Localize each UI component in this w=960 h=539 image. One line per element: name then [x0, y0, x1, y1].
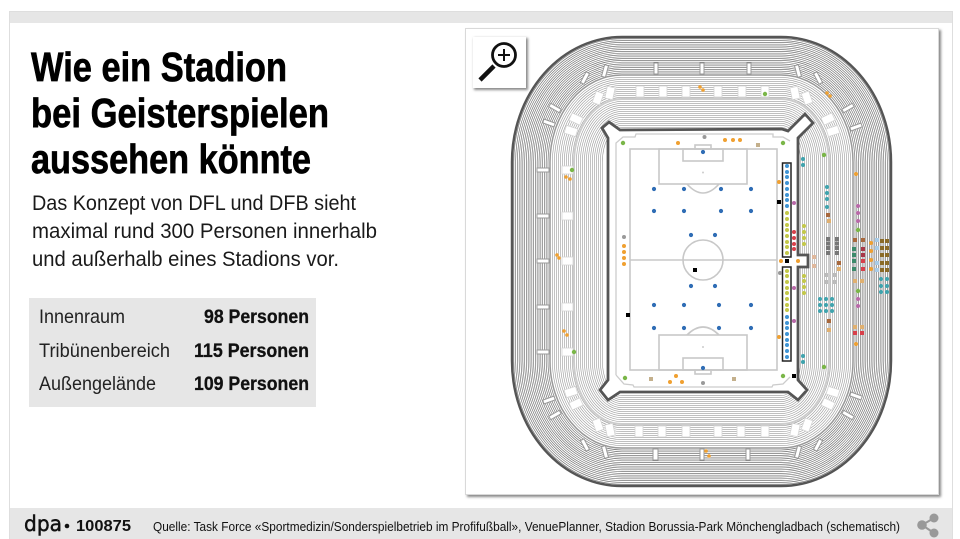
football pitch [630, 145, 777, 374]
markers: orange [555, 85, 873, 458]
markers: dark green squares [852, 247, 856, 271]
markers: green [570, 92, 860, 380]
benches [782, 163, 791, 361]
markers: red [792, 230, 865, 335]
apron outline [616, 134, 790, 387]
title: aussehen könnte [31, 136, 311, 182]
markers: pink [792, 201, 860, 323]
markers: dark grey squares [824, 237, 839, 284]
intro text: maximal rund 300 Personen innerhalb [32, 220, 377, 243]
panel: person counts table: 115 Personen [194, 340, 309, 362]
panel: person counts table: 98 Personen [204, 306, 309, 328]
panel: stadium map frame [466, 28, 941, 497]
panel: person counts table: Außengelände [39, 373, 156, 395]
stadium stands: inner tiers [552, 77, 851, 446]
title: bei Geisterspielen [31, 90, 329, 136]
markers: bench blue [785, 164, 789, 359]
outer tier access tabs [537, 63, 862, 460]
panel: person counts table: Innenraum [39, 306, 125, 328]
markers: black squares [626, 200, 796, 378]
stadium inner wall [600, 114, 813, 400]
icon: zoom button [473, 37, 528, 90]
icon: share [917, 514, 938, 538]
intro text: Das Konzept von DFL und DFB sieht [32, 192, 356, 215]
markers: teal [801, 157, 889, 364]
intro text [32, 192, 377, 271]
panel: person counts table: 109 Personen [194, 373, 309, 395]
stadium stands: outer tier [512, 37, 891, 486]
markers: light blue squares [875, 238, 879, 272]
panel: person counts table [29, 298, 316, 407]
source line: Quelle: Task Force «Sportmedizin/Sonderspielbetrieb im Profifußball», VenuePlanner, Stadion Borussia-Park Mönchengladbach (schematisch) [153, 519, 900, 534]
intro text: und außerhalb eines Stadions vor. [32, 248, 339, 271]
title: Wie ein Stadion [31, 44, 287, 90]
markers: yellow-green [785, 211, 806, 312]
footer bar [10, 508, 952, 539]
graphic number: 100875 [76, 518, 131, 535]
panel: person counts table: Tribünenbereich [39, 340, 170, 362]
markers: dark red squares [861, 247, 865, 257]
markers: players on the pitch [652, 150, 753, 370]
markers: olive brown squares [880, 239, 889, 272]
inner tier access tabs [562, 86, 840, 437]
markers: grey [622, 135, 782, 385]
markers: brown squares [826, 213, 865, 323]
markers: tan squares [649, 143, 864, 381]
title [31, 44, 329, 182]
logo: dpa: dpa [24, 512, 62, 536]
